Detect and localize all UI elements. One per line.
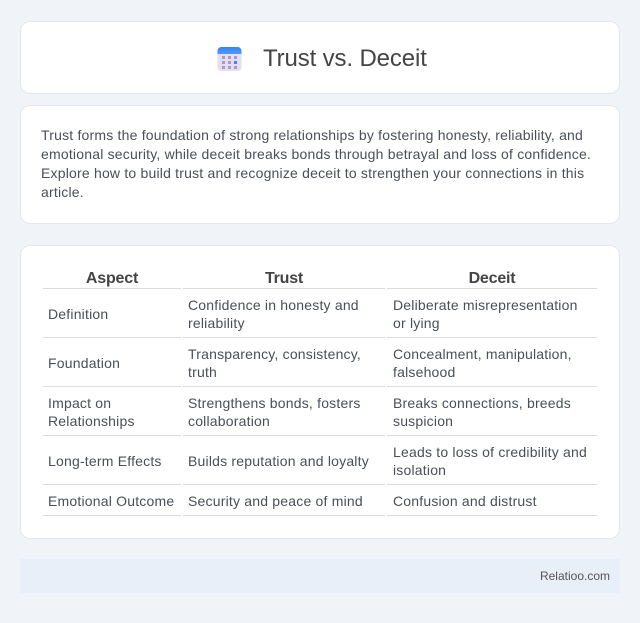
intro text	[41, 127, 591, 200]
footer bar	[20, 559, 620, 593]
long-term deceit: isolation	[393, 462, 446, 478]
long-term trust: Builds reputation and loyalty	[188, 453, 369, 469]
intro text: article.	[41, 184, 84, 200]
foundation deceit: falsehood	[393, 364, 456, 380]
foundation deceit	[393, 346, 572, 380]
icon: calendar	[218, 47, 242, 71]
definition trust	[188, 297, 359, 331]
impact trust: collaboration	[188, 413, 270, 429]
table header: trust: Trust	[265, 270, 303, 287]
row: emotional outcome: Emotional Outcome	[48, 493, 174, 509]
panel: header	[20, 21, 620, 94]
definition trust: reliability	[188, 315, 245, 331]
emotional deceit: Confusion and distrust	[393, 493, 537, 509]
panel: comparison table	[20, 245, 620, 539]
impact trust	[188, 395, 361, 429]
impact deceit	[393, 395, 571, 429]
footer credit: Relatioo.com	[540, 569, 610, 583]
emotional trust: Security and peace of mind	[188, 493, 363, 509]
definition trust: Confidence in honesty and	[188, 297, 359, 313]
impact trust: Strengthens bonds, fosters	[188, 395, 361, 411]
intro text: Explore how to build trust and recognize deceit to strengthen your connections in this	[41, 165, 584, 181]
row: long-term effects: Long-term Effects	[48, 453, 162, 469]
foundation deceit: Concealment, manipulation,	[393, 346, 572, 362]
impact deceit: suspicion	[393, 413, 453, 429]
row: impact on relationships	[48, 395, 135, 429]
table header: deceit: Deceit	[469, 270, 515, 287]
foundation trust: Transparency, consistency,	[188, 346, 361, 362]
row: definition: Definition	[48, 306, 108, 322]
panel: introduction	[20, 105, 620, 224]
intro text: Trust forms the foundation of strong relationships by fostering honesty, reliability, and	[41, 127, 583, 143]
title: Trust vs. Deceit	[263, 45, 427, 72]
definition deceit: or lying	[393, 315, 440, 331]
long-term deceit	[393, 444, 587, 478]
definition deceit	[393, 297, 578, 331]
table header: aspect: Aspect	[86, 270, 138, 287]
impact deceit: Breaks connections, breeds	[393, 395, 571, 411]
foundation trust	[188, 346, 361, 380]
foundation trust: truth	[188, 364, 217, 380]
definition deceit: Deliberate misrepresentation	[393, 297, 578, 313]
long-term deceit: Leads to loss of credibility and	[393, 444, 587, 460]
intro text: emotional security, while deceit breaks bonds through betrayal and loss of confidence.	[41, 146, 591, 162]
row: foundation: Foundation	[48, 355, 120, 371]
row: impact on relationships: Relationships	[48, 413, 135, 429]
row: impact on relationships: Impact on	[48, 395, 111, 411]
